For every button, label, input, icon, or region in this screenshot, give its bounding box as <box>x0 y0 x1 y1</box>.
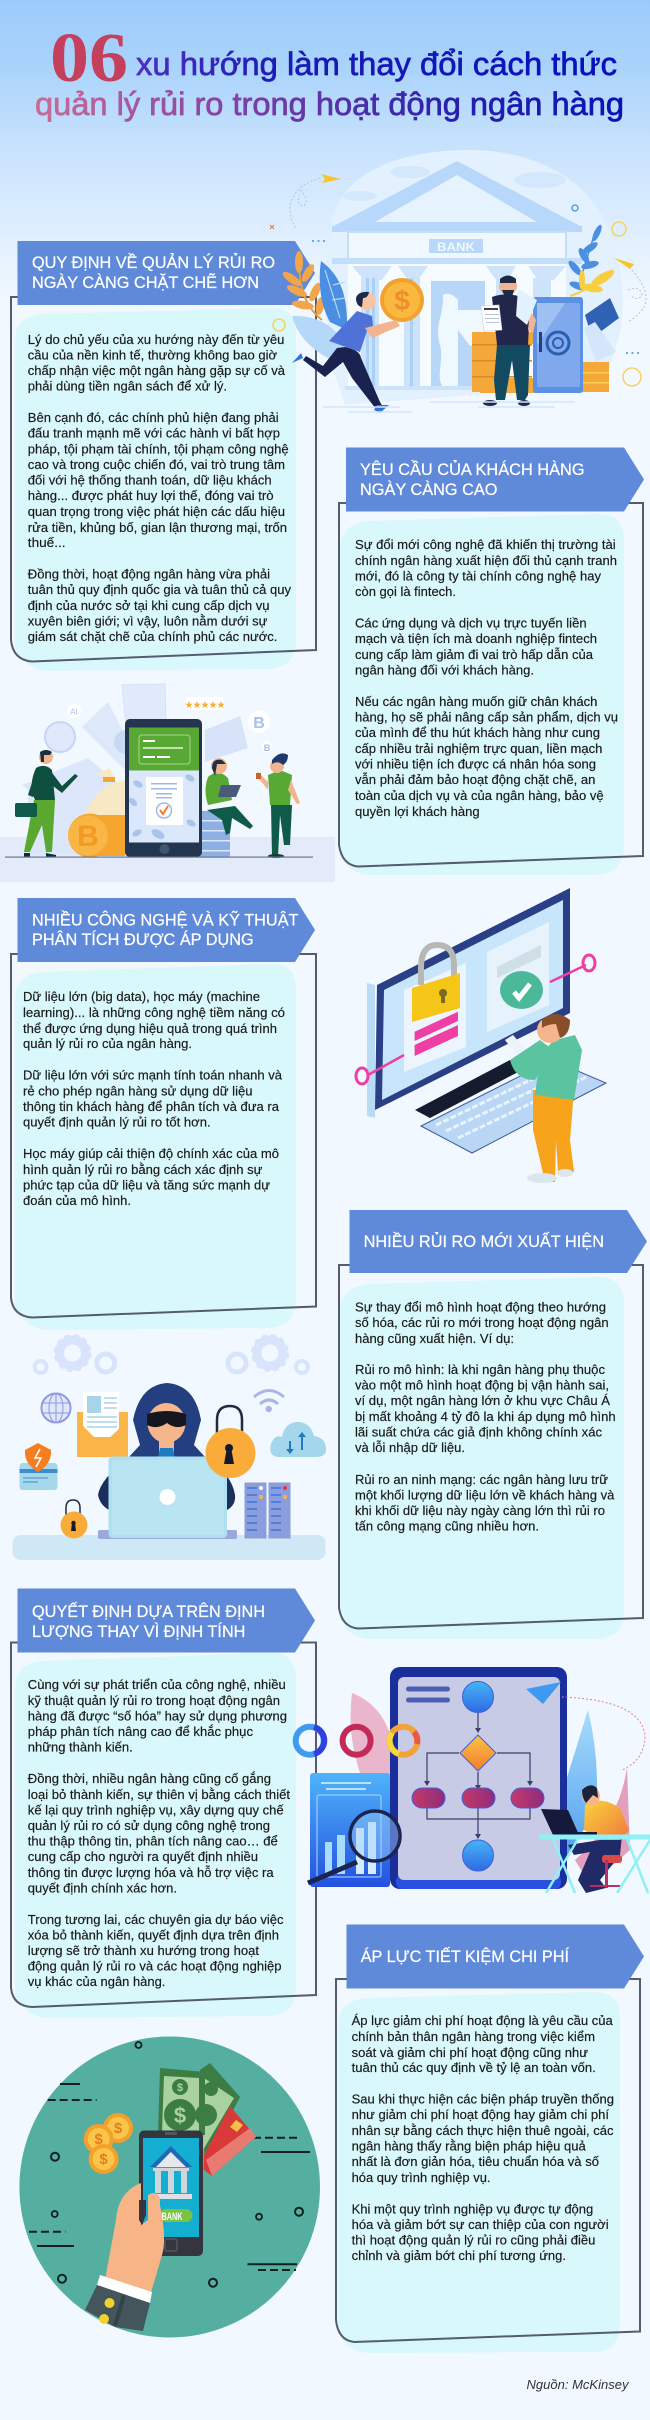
connector pins <box>356 955 595 1084</box>
body text: soát và giảm chi phí hoạt động cũng như <box>352 2045 588 2060</box>
panel: section 4 new risks <box>339 1210 647 1639</box>
background shapes: ★★★★★ <box>185 700 225 710</box>
body text: động quản lý rủi ro và các hoạt động nghiệp <box>28 1958 281 1974</box>
title line 1: xu hướng làm thay đổi cách thức <box>136 46 617 82</box>
globe icon <box>42 1394 70 1422</box>
running man with coin <box>292 278 424 413</box>
women with laptop <box>206 753 300 858</box>
panel background <box>340 514 624 875</box>
section heading ribbon: QUY ĐỊNH VỀ QUẢN LÝ RỦI RO <box>32 253 275 272</box>
ground line <box>5 856 313 858</box>
section heading ribbon <box>350 1210 647 1273</box>
title line 2: quản lý rủi ro trong hoạt động ngân hàng <box>35 86 624 122</box>
body text: phải dùng tiền ngân sách để xử lý. <box>28 378 227 394</box>
background shapes: B <box>253 715 265 732</box>
body text: Dữ liệu lớn (big data), học máy (machine <box>23 989 260 1004</box>
body text: Đồng thời, hoạt động ngân hàng vừa phải <box>28 566 270 582</box>
illustration: computer security <box>356 888 606 1183</box>
panel frame <box>336 1979 640 2342</box>
bank building: BANK <box>437 240 475 254</box>
decorative lines and rings <box>29 2042 310 2287</box>
body text: cầu của nền kinh tế, thường không bao giờ <box>28 348 277 362</box>
bank building <box>332 161 582 390</box>
body text: mạch và tiện ích mà doanh nghiệp fintech <box>355 631 597 646</box>
body text: xóa bỏ thành kiến, quyết định dựa trên định <box>28 1928 279 1942</box>
panel background <box>338 1992 620 2353</box>
gold coins: $ <box>99 2151 108 2168</box>
servers <box>244 1482 290 1538</box>
body text: của mình để thu hút khách hàng như cung <box>355 725 600 740</box>
body text: thông tin được lượng hóa và hỗ trợ việc ra <box>28 1865 274 1880</box>
laptop <box>98 1456 237 1539</box>
safe with coins and card <box>472 297 619 393</box>
section heading ribbon: NGÀY CÀNG CHẶT CHẼ HƠN <box>32 273 259 292</box>
body text: quyết định quản lý rủi ro tốt hơn. <box>23 1114 211 1130</box>
section heading ribbon: PHÂN TÍCH ĐƯỢC ÁP DỤNG <box>32 930 254 949</box>
panel frame <box>11 1642 316 2007</box>
background leaves <box>351 1693 630 1885</box>
body text: hóa quy trình nghiệp vụ. <box>352 2170 490 2185</box>
body text: kế lại quy trình nghiệp vụ, xây dựng quy chế <box>28 1802 284 1818</box>
panel: section 2 customer demands <box>339 448 644 875</box>
body text: quản lý rủi ro có sử dụng công nghệ trong <box>28 1818 270 1833</box>
section heading ribbon: ÁP LỰC TIẾT KIỆM CHI PHÍ <box>361 1947 569 1966</box>
body text: pháp phân tích nâng cao để khắc phục <box>28 1724 253 1739</box>
body text: tấn công mạng cũng nhiều hơn. <box>355 1518 539 1534</box>
body text <box>355 1300 616 1534</box>
smartphone with bank app: BANK <box>162 2211 183 2223</box>
banknotes: $ <box>174 2103 186 2128</box>
body text: hóa và giảm bớt sự can thiệp của con người <box>352 2217 609 2232</box>
body text: hàng cũng xuất hiện. Ví dụ: <box>355 1331 514 1346</box>
body text: giám sát chặt chẽ của chính phủ các nước. <box>28 629 277 644</box>
body text: learning)... là những công nghệ tiềm năng có <box>23 1005 285 1020</box>
body text: nhất là đơn giản hóa, tiêu chuẩn hóa và số <box>352 2154 599 2169</box>
keyboard <box>421 1060 606 1153</box>
section heading ribbon: YÊU CẦU CỦA KHÁCH HÀNG <box>360 460 585 479</box>
gold coins <box>84 2113 133 2174</box>
section heading ribbon <box>18 898 315 962</box>
title <box>35 20 624 122</box>
section heading ribbon: LƯỢNG THAY VÌ ĐỊNH TÍNH <box>32 1622 245 1641</box>
body text: với nhiều tiện ích được cá nhân hóa song <box>355 756 596 772</box>
man at desk with laptop <box>539 1785 650 1893</box>
banknotes <box>158 2063 240 2165</box>
body text: định của nước sở tại khi cung cấp dịch vụ <box>28 598 269 613</box>
body text: nhân sự bằng cách thực hiện thuê ngoài, các <box>352 2123 614 2138</box>
illustration: flowchart and analytics <box>296 1667 650 1893</box>
body text: chỉnh và giảm bớt chi phí tương ứng. <box>352 2248 566 2263</box>
running man with coin: $ <box>394 285 410 316</box>
envelope with document <box>77 1392 128 1457</box>
panel frame <box>11 297 316 662</box>
money bag and bitcoin coin <box>68 768 125 858</box>
illustration: bank building with people <box>270 150 646 413</box>
body text: chính bản thân ngân hàng trong việc kiểm <box>352 2029 595 2044</box>
body text: xuyên biên giới; vì vậy, luôn nằm dưới sự <box>28 614 268 628</box>
section heading ribbon: NGÀY CÀNG CAO <box>360 480 498 499</box>
body text: vẫn phải đảm bảo hoạt động chặt chẽ, an <box>355 772 595 787</box>
banker with document <box>481 276 537 406</box>
panel background <box>15 964 296 1330</box>
body text: lượng sẽ trở thành xu hướng trong hoạt <box>28 1943 259 1958</box>
wifi icon <box>254 1390 284 1412</box>
body text: hình quản lý rủi ro bằng cách xác định sự <box>23 1162 263 1177</box>
body text: Sau khi thực hiện các biện pháp truyền thống <box>352 2092 614 2106</box>
body text: hàng, họ sẽ phải nâng cấp sản phẩm, dịch vụ <box>355 710 618 724</box>
panel frame <box>11 954 316 1318</box>
body text: hàng đã được “số hóa” hay sử dụng phương <box>28 1708 287 1724</box>
body text: quản lý rủi ro của ngân hàng. <box>23 1036 192 1051</box>
cloud with arrows <box>270 1422 326 1457</box>
smartphone <box>125 719 202 857</box>
small padlock <box>60 1500 88 1538</box>
body text: lãi suất chứa các giả định không chính xác <box>355 1424 602 1440</box>
section heading ribbon: NHIỀU CÔNG NGHỆ VÀ KỸ THUẬT <box>32 910 298 930</box>
title number 06: 06 <box>50 20 128 97</box>
desk <box>12 1535 326 1560</box>
section heading ribbon: NHIỀU RỦI RO MỚI XUẤT HIỆN <box>364 1232 604 1251</box>
body text: loại bỏ thành kiến, sự thiên vị bằng cách thiết <box>28 1787 290 1802</box>
body text: quyền lợi khách hàng <box>355 804 480 819</box>
section heading ribbon <box>18 1588 315 1652</box>
body text: cung cấp cho người ra quyết định nhiều <box>28 1849 258 1864</box>
body text: Sự đổi mới công nghệ đã khiến thị trường tài <box>355 537 616 552</box>
panel: section 6 cost pressure <box>336 1924 644 2353</box>
panel background <box>15 1653 296 2018</box>
panel: section 5 quantitative decisions <box>11 1588 316 2018</box>
body text: thông tin khách hàng để phân tích và đưa ra <box>23 1099 280 1114</box>
illustration: hacker <box>12 1336 326 1560</box>
monitor <box>367 888 570 1118</box>
section heading ribbon <box>346 448 644 512</box>
body text: thuế... <box>28 535 66 550</box>
body text: rẻ cho phép ngân hàng sử dụng dữ liệu <box>23 1084 252 1098</box>
background shapes: AI <box>70 708 78 716</box>
donut charts <box>296 1727 417 1755</box>
man with briefcase <box>15 750 78 857</box>
hacker figure <box>98 1383 235 1510</box>
background shapes <box>22 684 272 855</box>
padlock <box>412 945 460 1056</box>
body text <box>23 989 285 1208</box>
body text: hàng... được phát huy lợi thế, đóng vai trò <box>28 488 274 503</box>
hand and sleeve <box>85 2183 164 2331</box>
body text: ví dụ, một ngân hàng lớn ở khu vực Châu Á <box>355 1393 610 1408</box>
body text <box>28 1677 290 1989</box>
body text <box>352 2013 614 2263</box>
panel background <box>340 1277 624 1639</box>
chart report with magnifier <box>308 1773 400 1887</box>
body text: thu thập thông tin, phân tích nâng cao… để <box>28 1834 278 1848</box>
body text: Các ứng dụng và dịch vụ trực tuyến liền <box>355 616 587 630</box>
large open padlock <box>206 1406 256 1478</box>
tablet with flowchart <box>390 1667 645 1889</box>
panel frame <box>339 1265 643 1628</box>
body text: cung cấp làm giảm đi vai trò hấp dẫn của <box>355 647 594 662</box>
body text: Cùng với sự phát triển của công nghệ, nhiều <box>28 1677 286 1692</box>
body text: mới, đó là công ty tài chính công nghệ hay <box>355 568 602 584</box>
shield and card <box>20 1443 58 1490</box>
body text: toàn của dịch vụ và của ngân hàng, bảo vệ <box>355 788 604 803</box>
background shapes: B <box>264 743 271 753</box>
body text: pháp, tội phạm tài chính, tội phạm công nghệ <box>28 442 289 456</box>
body text: quan trọng trong việc phát hiện các dấu hiệu <box>28 504 285 519</box>
body text: những thành kiến. <box>28 1740 133 1754</box>
smartphone with bank app <box>139 2130 203 2256</box>
panel: section 1 regulations <box>11 241 316 671</box>
gold coins: $ <box>95 2131 104 2148</box>
section heading ribbon: QUYẾT ĐỊNH DỰA TRÊN ĐỊNH <box>32 1602 265 1621</box>
credit card <box>204 2106 256 2176</box>
body text: Bên cạnh đó, các chính phủ hiện đang phải <box>28 410 279 425</box>
body text: Rủi ro an ninh mạng: các ngân hàng lưu trữ <box>355 1472 608 1487</box>
banknotes: $ <box>177 2082 183 2094</box>
panel background <box>15 308 296 671</box>
illustration: mobile banking <box>0 684 335 882</box>
body text: Đồng thời, nhiều ngân hàng cũng cố gắng <box>28 1771 271 1786</box>
body text: vụ khác của ngân hàng. <box>28 1974 165 1989</box>
gold coins: $ <box>114 2120 123 2137</box>
body text: bị mất khoảng 4 tỷ đô la khi áp dụng mô hình <box>355 1409 616 1424</box>
body text: vào một mô hình hoạt động bị vận hành sai, <box>355 1378 609 1392</box>
body text: Rủi ro mô hình: là khi ngân hàng phụ thuộc <box>355 1362 605 1377</box>
body text: như giảm chi phí hoạt động hay giảm chi phí <box>352 2107 609 2122</box>
body text: Trong tương lai, các chuyên gia dự báo việc <box>28 1912 284 1927</box>
body text: chấp nhận việc một ngân hàng gặp sự cố và <box>28 363 286 378</box>
body text: Khi một quy trình nghiệp vụ được tự động <box>352 2202 593 2216</box>
body text: Nếu các ngân hàng muốn giữ chân khách <box>355 694 597 709</box>
gears <box>35 1336 308 1373</box>
panel: section 3 analytics technologies <box>11 898 316 1330</box>
section heading ribbon <box>18 241 315 305</box>
source credit: Nguồn: McKinsey <box>526 2377 630 2392</box>
body text: tuân thủ quy định quốc gia và tuân thủ cả quy <box>28 582 291 597</box>
man with phone <box>505 1014 582 1183</box>
body text: đấu tranh mạnh mẽ với các hành vi bất hợp <box>28 426 280 440</box>
body text: cao và trong cuộc chiến đó, vai trò trung tâm <box>28 457 285 472</box>
section heading ribbon <box>346 1924 644 1988</box>
illustration: phone banking circle <box>19 2036 320 2338</box>
body text: quyết định chính xác hơn. <box>28 1880 177 1896</box>
body text: đoán của mô hình. <box>23 1193 131 1208</box>
body text: cấp nhiều trải nghiệm trực quan, liền mạch <box>355 741 602 756</box>
body text <box>355 537 618 819</box>
body text: rửa tiền, khủng bố, gian lận thương mại, trốn <box>28 520 287 535</box>
body text: và lỗi nhập dữ liệu. <box>355 1440 465 1455</box>
check badge <box>500 971 543 1009</box>
decorations: paper planes, coins, dots <box>270 174 646 412</box>
body text: tuân thủ các quy định về tỷ lệ an toàn vốn. <box>352 2060 596 2075</box>
body text: thì hoạt động quản lý rủi ro cũng phải điều <box>352 2232 595 2248</box>
money bag and bitcoin coin: B <box>77 820 99 853</box>
teal circle <box>19 2036 320 2338</box>
body text: khi khối dữ liệu này ngày càng lớn thì rủi ro <box>355 1503 605 1518</box>
body text: ngân hàng thấy rằng biện pháp hiệu quả <box>352 2138 587 2154</box>
body text: đối với hệ thống thanh toán, dữ liệu khách <box>28 472 272 488</box>
body text: số hóa, các rủi ro mới trong hoạt động ngân <box>355 1315 609 1330</box>
body text <box>28 332 291 644</box>
body text: Học máy giúp cải thiện độ chính xác của mô <box>23 1146 279 1161</box>
body text: Sự thay đổi mô hình hoạt động theo hướng <box>355 1300 606 1314</box>
body text: một khối lượng dữ liệu lớn về khách hàng và <box>355 1488 615 1502</box>
body text: Áp lực giảm chi phí hoạt động là yêu cầu của <box>352 2013 614 2028</box>
body text: Lý do chủ yếu của xu hướng này đến từ yêu <box>28 332 284 347</box>
body text: còn gọi là fintech. <box>355 584 456 599</box>
body text: phức tạp của dữ liệu và tăng sức mạnh dự <box>23 1178 270 1192</box>
panel frame <box>339 503 643 866</box>
body text: chính ngân hàng xuất hiện đối thủ cạnh tranh <box>355 553 617 568</box>
body text: kỹ thuật quản lý rủi ro trong hoạt động ngân <box>28 1693 280 1708</box>
body text: ngân hàng đối với khách hàng. <box>355 662 534 678</box>
body text: thể được ứng dụng hiệu quả trong quá trình <box>23 1021 277 1036</box>
coin stack <box>200 811 230 857</box>
plants <box>281 224 616 360</box>
body text: Dữ liệu lớn với sức mạnh tính toán nhanh và <box>23 1068 283 1082</box>
